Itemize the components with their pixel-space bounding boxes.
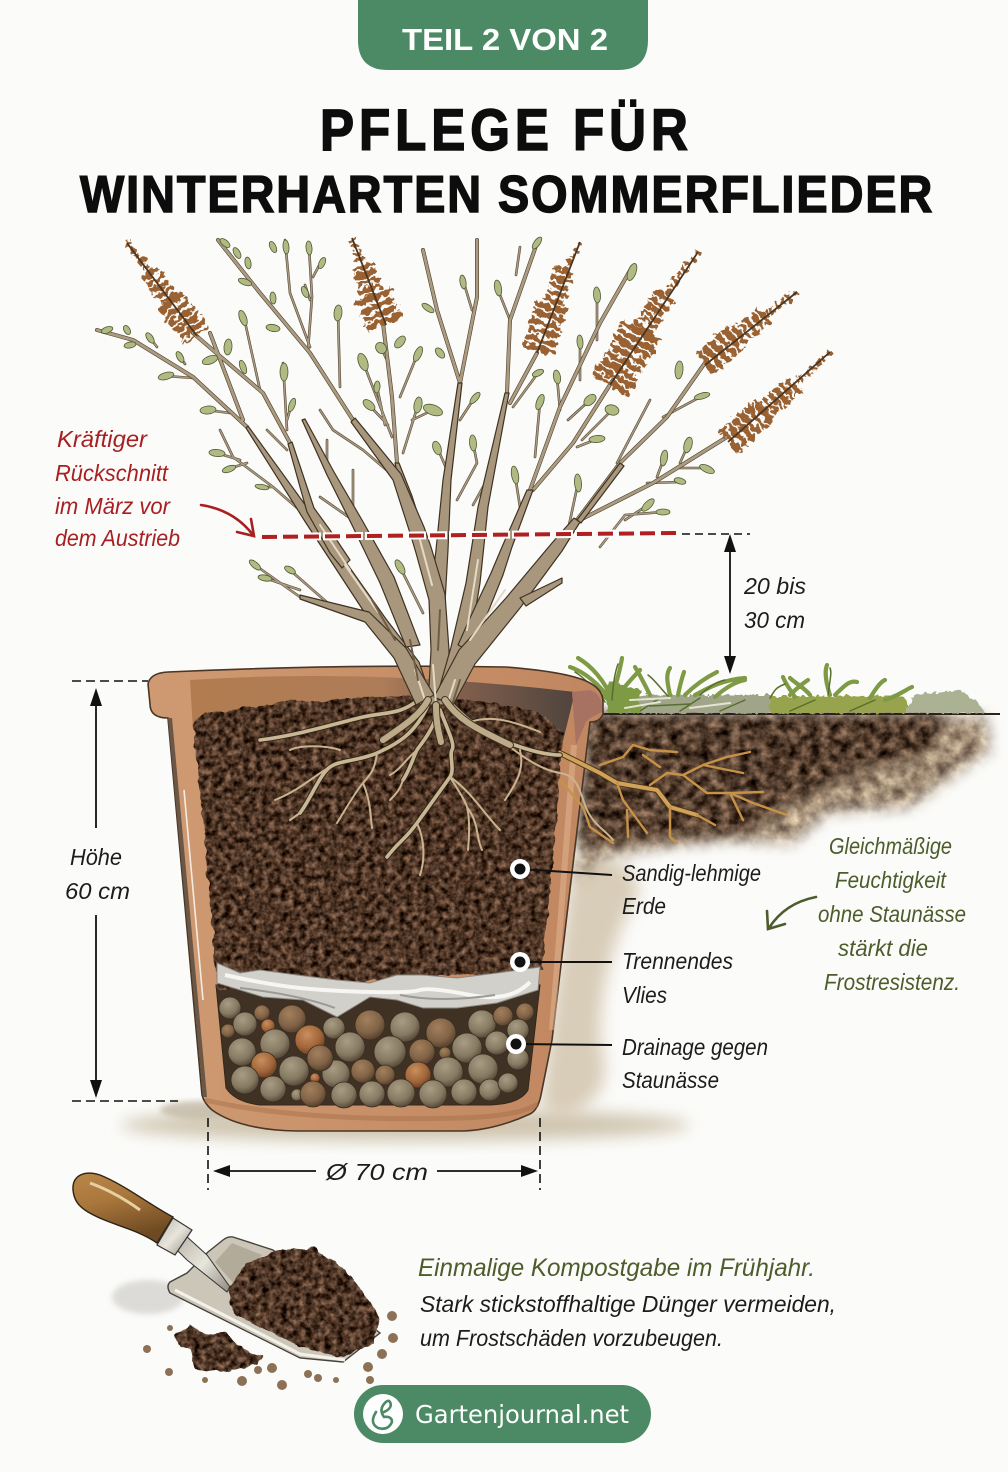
dimension: 20 to 30 cm: 30 cm xyxy=(744,607,805,633)
upper branches xyxy=(97,240,727,520)
shrub stems xyxy=(97,240,727,745)
header tab: part 2 of 2 xyxy=(358,0,648,70)
wall highlight xyxy=(184,790,203,1000)
separating fleece xyxy=(217,963,540,1017)
title: PFLEGE FÜR xyxy=(320,98,688,163)
footer brand pill: Gartenjournal.net xyxy=(415,1400,629,1429)
layer callout: fleece: Trennendes xyxy=(622,948,733,974)
header tab: part 2 of 2: TEIL 2 VON 2 xyxy=(402,22,608,57)
pruning note: dem Austrieb xyxy=(55,525,180,551)
tapered main stems xyxy=(246,383,624,705)
grass xyxy=(570,658,985,713)
pruning note: Kräftiger xyxy=(57,426,148,452)
dimension: 20 to 30 cm xyxy=(682,534,807,674)
pruning arrow xyxy=(201,505,254,536)
composting advice: um Frostschäden vorzubeugen. xyxy=(420,1325,723,1351)
pruning note: im März vor xyxy=(55,493,171,519)
ferrule xyxy=(157,1218,192,1255)
trowel neck xyxy=(177,1235,230,1292)
dimension: diameter 70 cm xyxy=(208,1118,540,1190)
dimension: diameter 70 cm: Ø 70 cm xyxy=(325,1159,428,1185)
trowel with compost xyxy=(73,1173,398,1390)
pot shell xyxy=(148,666,603,1131)
composting advice xyxy=(418,1254,836,1351)
moisture note: Frostresistenz. xyxy=(824,969,960,995)
spilled soil xyxy=(175,1325,262,1372)
pruning line xyxy=(262,533,680,537)
dimension: 20 to 30 cm: 20 bis xyxy=(743,573,807,599)
moisture arrow xyxy=(767,897,816,929)
handle xyxy=(73,1173,173,1243)
root flare xyxy=(383,700,510,745)
bark highlights xyxy=(320,525,505,705)
dimension: height 60 cm: 60 cm xyxy=(65,878,130,904)
pruning note xyxy=(55,426,180,551)
expanded clay drainage balls xyxy=(219,997,534,1108)
twigs xyxy=(150,240,707,613)
layer callout: fleece xyxy=(510,948,733,1008)
blade xyxy=(168,1237,380,1362)
layer callout: drainage: Drainage gegen xyxy=(622,1034,768,1060)
layer callout: soil xyxy=(510,859,761,919)
trowel shadow xyxy=(112,1280,184,1314)
moisture note: Feuchtigkeit xyxy=(835,867,947,893)
compost heap xyxy=(228,1248,380,1357)
layer callout: drainage: Staunässe xyxy=(622,1067,719,1093)
title xyxy=(80,98,932,224)
layer callout: soil: Erde xyxy=(622,893,666,919)
roots xyxy=(260,700,787,875)
moisture note: ohne Staunässe xyxy=(818,901,966,927)
moisture note: stärkt die xyxy=(838,935,928,961)
pruning note: Rückschnitt xyxy=(55,460,170,486)
panicle stalks xyxy=(127,238,830,442)
turf band xyxy=(606,680,985,713)
ground wash below pot xyxy=(120,856,690,1141)
plant pot cross-section xyxy=(148,666,603,1131)
composting advice: Stark stickstoffhaltige Dünger vermeiden, xyxy=(420,1291,836,1317)
buds and young leaves xyxy=(100,236,716,582)
roots inside pot xyxy=(260,700,560,857)
layer callout: soil: Sandig-lehmige xyxy=(622,860,761,886)
dried flower panicles xyxy=(127,238,830,442)
back wall xyxy=(190,676,575,745)
right rim cut face xyxy=(572,690,602,745)
potting soil xyxy=(193,696,563,990)
dimension: height 60 cm: Höhe xyxy=(70,844,122,870)
composting advice: Einmalige Kompostgabe im Frühjahr. xyxy=(418,1254,815,1282)
dimension: height 60 cm xyxy=(65,681,178,1101)
icon: sprout logo xyxy=(373,1401,392,1429)
layer callout: fleece: Vlies xyxy=(622,982,667,1008)
footer brand pill xyxy=(354,1385,651,1443)
title: WINTERHARTEN SOMMERFLIEDER xyxy=(80,166,932,224)
grass blades xyxy=(570,658,912,711)
crumbs xyxy=(143,1311,398,1390)
drainage backing xyxy=(216,985,540,1105)
layer callout: drainage xyxy=(506,1034,768,1093)
garden soil beside pot xyxy=(578,714,1000,880)
moisture note: Gleichmäßige xyxy=(829,833,952,859)
roots outside pot xyxy=(560,745,787,843)
outer wall shadow xyxy=(168,718,207,1097)
moisture note xyxy=(818,833,966,995)
